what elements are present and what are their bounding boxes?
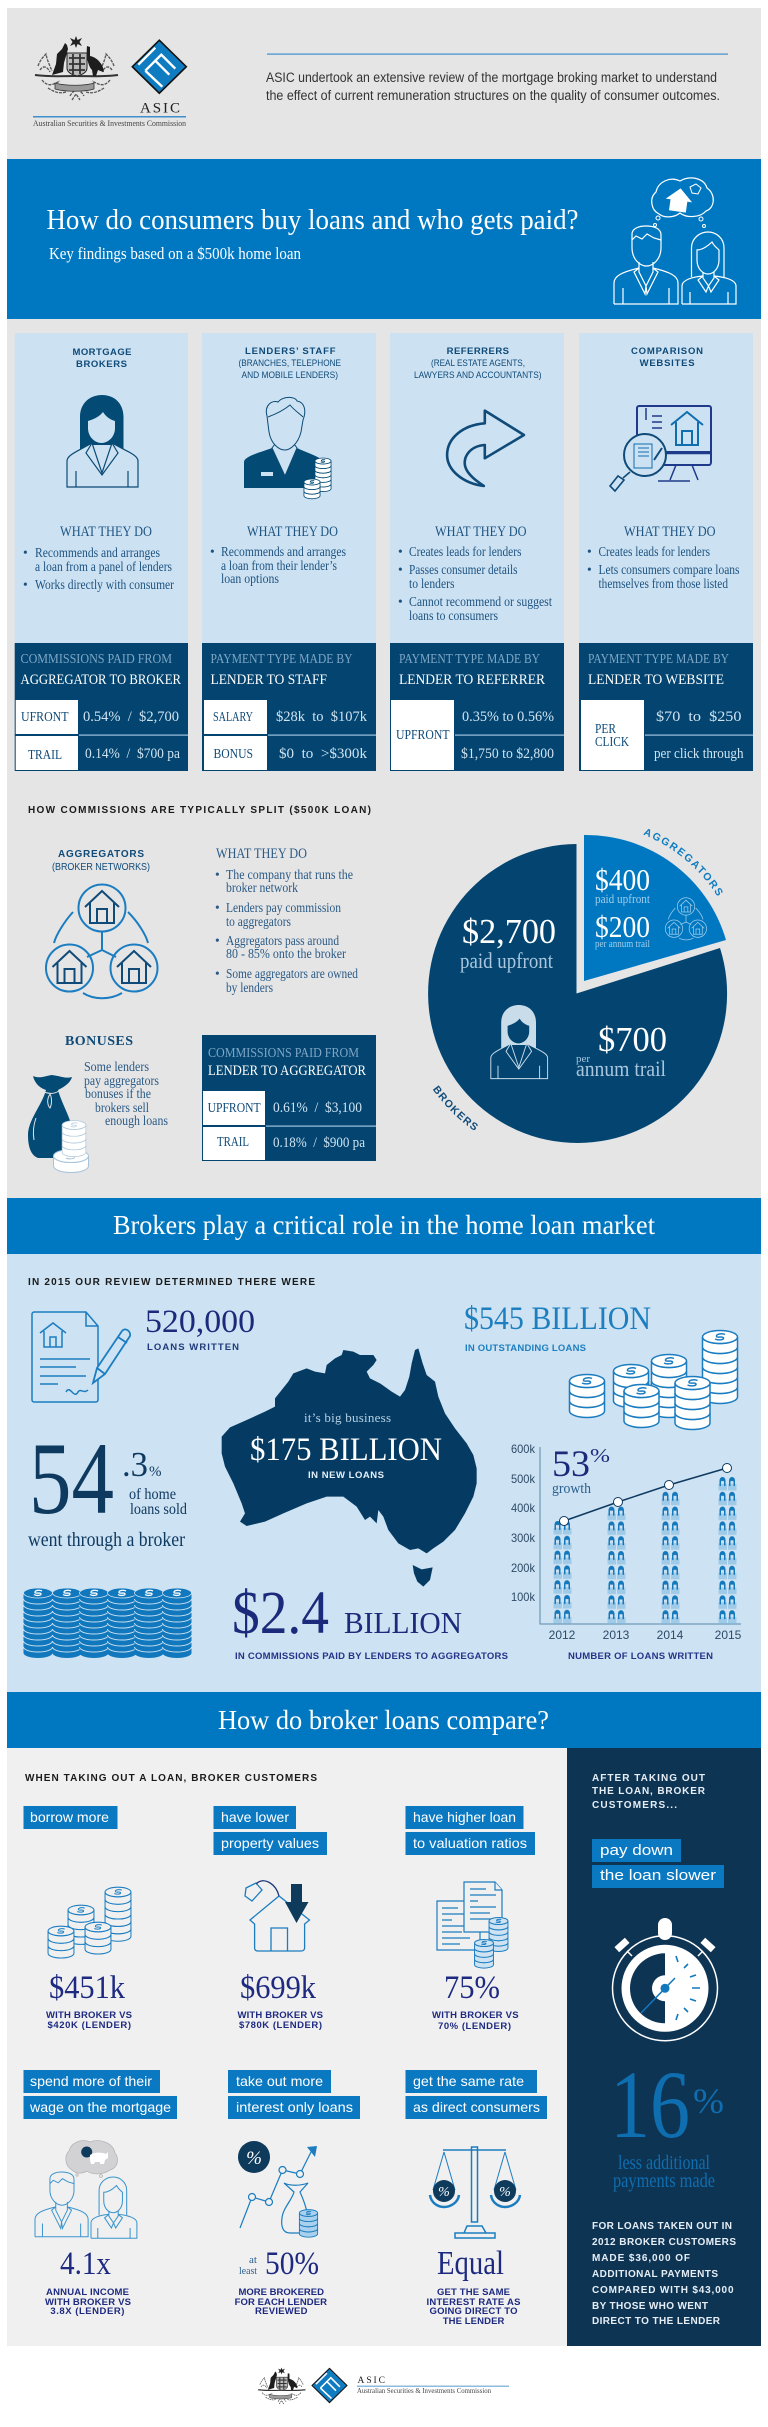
aggregators heading: (BROKER NETWORKS) xyxy=(52,862,150,873)
stat: $545 billion: IN OUTSTANDING LOANS xyxy=(465,1343,586,1354)
stat: $699k: $780K (LENDER) xyxy=(239,2020,322,2031)
payment: lender to website: PER xyxy=(595,722,617,737)
y axis labels: 500k xyxy=(511,1472,536,1486)
icon: couple thinking about a house xyxy=(614,178,736,304)
bonuses text: BONUSES xyxy=(65,1034,133,1049)
table: lender to aggregator: COMMISSIONS PAID FROM xyxy=(208,1046,359,1061)
what they do: referrers: loans to consumers xyxy=(409,608,498,623)
icon: couple and savings cloud xyxy=(35,2141,137,2238)
icon: monitor with magnifier xyxy=(610,406,711,491)
tag: borrow more xyxy=(24,1806,118,1829)
banner: how do broker loans compare: How do broker loans compare? xyxy=(218,1705,549,1735)
stat: $699k: WITH BROKER VS xyxy=(238,2010,323,2021)
stat: $451k xyxy=(46,1970,132,2031)
bonuses text: bonuses if the xyxy=(85,1087,151,1102)
x axis labels: 2015 xyxy=(715,1628,742,1642)
x axis labels xyxy=(549,1628,742,1642)
commissions: aggregator to broker: AGGREGATOR TO BROKER xyxy=(20,672,181,688)
x axis labels: 2014 xyxy=(657,1628,684,1642)
icon: coin stacks, borrow more xyxy=(48,1887,131,1958)
stat: 16% less additional payments: % xyxy=(693,2081,724,2121)
heading: in 2015: IN 2015 OUR REVIEW DETERMINED THERE WERE xyxy=(28,1277,315,1288)
what they do: staff xyxy=(210,524,346,586)
chart: number of loans written: NUMBER OF LOANS WRITTEN xyxy=(568,1651,713,1662)
heading: lenders' staff xyxy=(238,346,341,381)
trend line xyxy=(560,1464,732,1526)
table: lender to aggregator: 0.61% / $3,100 xyxy=(273,1100,362,1116)
icon: balance scales: % xyxy=(438,2185,450,2200)
what aggregators do: The company that runs the xyxy=(226,867,353,882)
what they do: brokers: Works directly with consumer xyxy=(35,577,174,592)
footer ASIC logo: ASIC xyxy=(358,2376,385,2386)
payment: lender to website: PAYMENT TYPE MADE BY xyxy=(588,652,729,667)
text: 2012 additional payments: MADE $36,000 OF xyxy=(592,2253,690,2264)
banner: brokers play a critical role xyxy=(7,1198,761,1254)
what aggregators do: WHAT THEY DO xyxy=(216,846,307,862)
text: 2012 additional payments: ADDITIONAL PAYMENTS xyxy=(592,2269,718,2280)
what aggregators do: Some aggregators are owned xyxy=(226,966,358,981)
pie text: aggregator amounts: per annum trail xyxy=(595,939,650,950)
icon: balance scales: % xyxy=(499,2185,511,2200)
payment: lender to referrer xyxy=(391,652,564,770)
heading: after taking out the loan: CUSTOMERS... xyxy=(592,1800,677,1811)
what they do: brokers: • xyxy=(23,545,28,560)
stat: 54.3%: went through a broker xyxy=(28,1530,185,1551)
icon: curved referral arrow xyxy=(447,411,524,486)
map of Australia xyxy=(222,1348,477,1587)
icon: documents and coins xyxy=(437,1882,508,1968)
tag: lower property values: have lower xyxy=(221,1809,289,1825)
stat: $2.4 billion: BILLION xyxy=(344,1605,462,1640)
pie text: annum trail: per xyxy=(576,1053,590,1065)
pie text: annum trail: annum trail xyxy=(576,1056,666,1081)
icon: aggregator network of houses xyxy=(46,884,158,998)
stat: 75%: 75% xyxy=(444,1970,500,2006)
tag: borrow more: borrow more xyxy=(30,1809,109,1825)
heading: after taking out the loan xyxy=(592,1773,706,1811)
what aggregators do: Aggregators pass around xyxy=(226,933,339,948)
stat: at least 50%: 50% xyxy=(265,2246,319,2282)
stat: 54.3%: % xyxy=(149,1464,162,1480)
heading: referrers: (REAL ESTATE AGENTS, xyxy=(431,358,525,369)
map text: $175 billion in new loans xyxy=(250,1410,442,1481)
header intro text: ASIC undertook an extensive review of the mortgage broking market to understand xyxy=(266,70,717,85)
what they do: referrers: Creates leads for lenders xyxy=(409,544,522,559)
icon: growth chart and money bag: % xyxy=(246,2148,262,2169)
header intro text xyxy=(266,54,728,103)
pie text: paid upfront: $2,700 xyxy=(462,912,556,951)
payment: lender to referrer: LENDER TO REFERRER xyxy=(399,672,545,688)
payment: lender to staff: LENDER TO STAFF xyxy=(210,672,327,688)
what they do: staff: Recommends and arranges xyxy=(221,544,346,559)
stat: at least 50%: least xyxy=(239,2265,257,2277)
text: 2012 additional payments: COMPARED WITH $43,000 xyxy=(592,2285,734,2296)
stat: $451k: $451k xyxy=(49,1970,125,2006)
tag: higher loan to valuation: have higher loan xyxy=(413,1809,516,1825)
stat: $2.4 billion xyxy=(232,1580,508,1662)
y axis labels: 400k xyxy=(511,1501,536,1515)
heading: referrers: LAWYERS AND ACCOUNTANTS) xyxy=(414,370,542,381)
stat: 520,000 loans written: 520,000 xyxy=(145,1304,255,1340)
icon: growth chart and money bag xyxy=(238,2141,318,2237)
x axis labels: 2013 xyxy=(603,1628,630,1642)
panel: comparison websites xyxy=(579,333,753,771)
icon: coin stacks xyxy=(570,1330,738,1430)
commissions: aggregator to broker: UFRONT xyxy=(21,710,69,725)
panel: after taking out the loan xyxy=(567,1748,761,2346)
light blue market panel xyxy=(7,1254,761,1692)
heading: lenders' staff: (BRANCHES, TELEPHONE xyxy=(238,358,341,369)
y axis labels: 100k xyxy=(511,1590,536,1604)
payment: lender to staff: BONUS xyxy=(214,747,253,762)
what they do: brokers: • xyxy=(23,577,28,592)
aggregators heading: AGGREGATORS xyxy=(58,849,144,860)
payment: lender to referrer: 0.35% to 0.56% xyxy=(462,709,554,725)
payment: lender to website: per click through xyxy=(654,746,744,762)
what aggregators do: Lenders pay commission xyxy=(226,900,341,915)
panel: referrers xyxy=(390,333,564,771)
what they do: referrers xyxy=(398,524,552,623)
banner: brokers play a critical role: Brokers play a critical role in the home loan market xyxy=(113,1210,655,1240)
pie text: annum trail xyxy=(576,1020,667,1081)
stat: at least 50%: MORE BROKERED xyxy=(238,2287,324,2298)
stat: 54.3% xyxy=(28,1422,187,1551)
what they do: referrers: WHAT THEY DO xyxy=(435,524,527,540)
stat: at least 50% xyxy=(235,2246,327,2317)
what aggregators do: broker network xyxy=(226,880,298,895)
stat: $545 billion xyxy=(464,1301,651,1354)
tag: spend more of their wage: wage on the mortgage xyxy=(29,2099,171,2115)
y axis labels: 300k xyxy=(511,1531,536,1545)
what they do: referrers: to lenders xyxy=(409,576,454,591)
payment: lender to referrer: UPFRONT xyxy=(396,728,450,743)
people columns xyxy=(553,1476,737,1624)
stat: 75%: WITH BROKER VS xyxy=(432,2010,519,2021)
what they do: websites xyxy=(587,524,740,591)
bonuses text: pay aggregators xyxy=(84,1074,159,1089)
pie slice: aggregators xyxy=(584,835,726,981)
banner: how do consumers buy loans xyxy=(7,159,761,319)
header intro text: the effect of current remuneration structures on the quality of consumer outcomes. xyxy=(266,88,720,103)
heading: when taking out a loan: WHEN TAKING OUT A LOAN, BROKER CUSTOMERS xyxy=(25,1773,317,1784)
stat: 16% less additional payments: payments made xyxy=(613,2170,715,2192)
payment: lender to staff: SALARY xyxy=(213,710,253,725)
what they do: staff: loan options xyxy=(221,571,279,586)
bonuses text: enough loans xyxy=(105,1114,168,1129)
payment: lender to staff: $28k to $107k xyxy=(276,709,367,725)
icon: bank staff member with coins xyxy=(244,397,331,499)
what they do: referrers: Passes consumer details xyxy=(409,562,518,577)
pie label: aggregators: AGGREGATORS xyxy=(643,828,723,896)
map text: $175 billion in new loans: IN NEW LOANS xyxy=(308,1470,384,1481)
stat: 75% xyxy=(432,1970,519,2032)
stat: equal: GOING DIRECT TO xyxy=(430,2306,518,2317)
what they do: brokers: WHAT THEY DO xyxy=(60,524,152,540)
tag: same rate: get the same rate xyxy=(413,2073,524,2089)
tag: pay down the loan slower xyxy=(592,1839,724,1888)
y axis labels: 600k xyxy=(511,1442,536,1456)
pie text: aggregator amounts: paid upfront xyxy=(595,892,650,906)
payment: lender to staff: PAYMENT TYPE MADE BY xyxy=(210,652,352,667)
table: lender to aggregator: 0.18% / $900 pa xyxy=(273,1135,365,1151)
payment: lender to website xyxy=(581,652,753,770)
pie label: brokers: BROKERS xyxy=(433,1085,478,1130)
panel: mortgage brokers xyxy=(15,333,188,771)
stat: 54.3%: of home xyxy=(129,1486,176,1503)
tag: spend more of their wage xyxy=(24,2070,177,2119)
footer ASIC logo xyxy=(258,2368,509,2404)
x axis labels: 2012 xyxy=(549,1628,576,1642)
aggregators heading xyxy=(52,849,150,873)
stat: 16% less additional payments xyxy=(610,2051,724,2192)
text: 2012 additional payments: 2012 BROKER CUSTOMERS xyxy=(592,2237,736,2248)
stat: 54.3%: 54 xyxy=(29,1422,114,1536)
commissions: aggregator to broker: 0.54% / $2,700 xyxy=(83,709,179,725)
what they do: brokers: a loan from a panel of lenders xyxy=(35,559,172,574)
growth label: % xyxy=(590,1445,610,1467)
stat: 4.1x annual income: 4.1x xyxy=(60,2246,111,2282)
text: 2012 additional payments xyxy=(592,2221,736,2327)
banner: how do consumers buy loans: Key findings based on a $500k home loan xyxy=(49,244,301,263)
payment: lender to website: LENDER TO WEBSITE xyxy=(588,672,724,688)
heading: mortgage brokers xyxy=(72,347,132,370)
heading: referrers: REFERRERS xyxy=(447,346,509,357)
icon: money bag and coins xyxy=(28,1075,88,1172)
panel: lenders' staff xyxy=(202,333,376,771)
icon: balance scales xyxy=(430,2147,520,2238)
stat: at least 50%: REVIEWED xyxy=(255,2306,308,2317)
what they do: websites: Lets consumers compare loans xyxy=(598,562,740,577)
pie text: paid upfront xyxy=(460,912,556,973)
what aggregators do: • xyxy=(215,900,220,915)
heading: lenders' staff: LENDERS’ STAFF xyxy=(245,346,336,357)
text: 2012 additional payments: BY THOSE WHO WENT xyxy=(592,2301,708,2312)
table: lender to aggregator: TRAIL xyxy=(217,1135,249,1150)
growth label xyxy=(552,1444,610,1497)
stat: 520,000 loans written: LOANS WRITTEN xyxy=(147,1342,239,1353)
what aggregators do: • xyxy=(215,966,220,981)
y axis labels xyxy=(511,1442,536,1604)
stat: equal: THE LENDER xyxy=(443,2316,505,2327)
tag: lower property values xyxy=(214,1806,327,1855)
stat: 4.1x annual income: WITH BROKER VS xyxy=(45,2297,131,2308)
what they do: referrers: • xyxy=(398,562,403,577)
pie text: aggregator amounts: $200 xyxy=(595,909,650,944)
pie text: aggregator amounts xyxy=(595,862,650,950)
what aggregators do: 80 - 85% onto the broker xyxy=(226,946,346,961)
what they do: websites: • xyxy=(587,544,592,559)
tag: interest only loans: take out more xyxy=(236,2073,323,2089)
pie text: annum trail: $700 xyxy=(598,1020,667,1059)
what they do: staff: WHAT THEY DO xyxy=(247,524,338,540)
stat: equal: INTEREST RATE AS xyxy=(426,2297,520,2308)
bonuses text: Some lenders xyxy=(84,1060,149,1075)
stat: 54.3%: loans sold xyxy=(130,1501,187,1518)
stat: 75%: 70% (LENDER) xyxy=(438,2021,511,2032)
what aggregators do: by lenders xyxy=(226,980,273,995)
stat: 54.3%: .3 xyxy=(122,1445,148,1484)
pie text: paid upfront: paid upfront xyxy=(460,948,553,973)
stat: at least 50%: FOR EACH LENDER xyxy=(235,2297,327,2308)
stat: $699k xyxy=(238,1970,323,2031)
stat: at least 50%: at xyxy=(249,2254,257,2266)
what aggregators do xyxy=(215,846,358,995)
header: ASIC logo: Australian Securities & Investments Commission xyxy=(33,119,186,128)
icon: house with price falling xyxy=(245,1881,310,1951)
table: lender to aggregator: LENDER TO AGGREGATOR xyxy=(208,1063,366,1079)
tag: same rate xyxy=(406,2070,547,2119)
chart: number of loans written xyxy=(511,1442,742,1662)
heading: mortgage brokers: BROKERS xyxy=(76,359,127,370)
what they do: referrers: • xyxy=(398,544,403,559)
what they do: referrers: Cannot recommend or suggest xyxy=(409,594,552,609)
what they do: websites: themselves from those listed xyxy=(598,576,728,591)
icon: broker in pie xyxy=(491,1005,548,1079)
stat: 16% less additional payments: less additional xyxy=(618,2152,710,2174)
tag: higher loan to valuation: to valuation ratios xyxy=(413,1835,527,1851)
icon: rows of blue coins xyxy=(24,1588,192,1658)
footer ASIC logo: Australian Securities & Investments Commission xyxy=(357,2387,491,2395)
growth label: growth xyxy=(552,1481,591,1497)
stat: $451k: WITH BROKER VS xyxy=(46,2010,132,2021)
icon: stopwatch xyxy=(612,1918,718,2041)
panel: when taking out a loan xyxy=(7,1748,567,2346)
stat: $451k: $420K (LENDER) xyxy=(48,2020,131,2031)
text: 2012 additional payments: DIRECT TO THE LENDER xyxy=(592,2316,721,2327)
what they do: websites: • xyxy=(587,562,592,577)
commissions: aggregator to broker xyxy=(16,652,188,770)
stat: equal xyxy=(426,2245,520,2327)
what aggregators do: to aggregators xyxy=(226,914,291,929)
stat: $699k: $699k xyxy=(240,1970,316,2006)
tag: pay down the loan slower: the loan slower xyxy=(600,1867,716,1884)
what aggregators do: • xyxy=(215,867,220,882)
tag: interest only loans: interest only loans xyxy=(236,2099,353,2115)
payment: lender to staff: $0 to >$300k xyxy=(279,746,367,762)
heading: after taking out the loan: THE LOAN, BROKER xyxy=(592,1786,706,1797)
banner: how do consumers buy loans: How do consumers buy loans and who gets paid? xyxy=(46,204,578,236)
pie text: aggregator amounts: $400 xyxy=(595,862,650,897)
what aggregators do: • xyxy=(215,933,220,948)
header: ASIC logo xyxy=(33,36,186,128)
bonuses text xyxy=(65,1034,168,1129)
payment: lender to referrer: $1,750 to $2,800 xyxy=(461,746,554,762)
commissions: aggregator to broker: TRAIL xyxy=(28,748,62,763)
top grey background panel xyxy=(7,8,761,1198)
tag: same rate: as direct consumers xyxy=(413,2099,540,2115)
table: lender to aggregator xyxy=(202,1035,376,1161)
stat: $2.4 billion: $2.4 xyxy=(232,1580,329,1647)
commissions: aggregator to broker: 0.14% / $700 pa xyxy=(85,746,180,762)
heading: after taking out the loan: AFTER TAKING OUT xyxy=(592,1773,705,1784)
stat: 16% less additional payments: 16 xyxy=(610,2051,690,2158)
heading: referrers xyxy=(414,346,542,381)
commissions: aggregator to broker: COMMISSIONS PAID FROM xyxy=(20,652,172,667)
what they do: websites: WHAT THEY DO xyxy=(624,524,716,540)
map text: $175 billion in new loans: $175 BILLION xyxy=(250,1432,442,1468)
heading: comparison websites: COMPARISON xyxy=(631,346,703,357)
heading: comparison websites: WEBSITES xyxy=(640,358,695,369)
stat: equal: GET THE SAME xyxy=(437,2287,510,2298)
pie slice: brokers xyxy=(428,844,727,1143)
tag: higher loan to valuation xyxy=(406,1806,535,1855)
payment: lender to website: CLICK xyxy=(595,735,629,750)
pie chart: commission split xyxy=(428,828,728,1143)
payment: lender to website: $70 to $250 xyxy=(656,709,742,725)
banner: how do broker loans compare xyxy=(7,1692,761,1748)
map text: $175 billion in new loans: it’s big business xyxy=(304,1410,391,1425)
tag: spend more of their wage: spend more of their xyxy=(30,2073,152,2089)
stat: 4.1x annual income xyxy=(45,2246,131,2317)
tag: pay down the loan slower: pay down xyxy=(600,1842,673,1859)
what they do: staff: • xyxy=(210,544,215,559)
what they do: brokers: Recommends and arranges xyxy=(35,545,160,560)
stat: $545 billion: $545 BILLION xyxy=(464,1301,651,1337)
growth label: 53 xyxy=(552,1444,590,1485)
stat: 4.1x annual income: ANNUAL INCOME xyxy=(46,2287,129,2298)
table: lender to aggregator: UPFRONT xyxy=(208,1101,261,1116)
heading: lenders' staff: AND MOBILE LENDERS) xyxy=(242,370,338,381)
tag: lower property values: property values xyxy=(221,1835,319,1851)
heading: mortgage brokers: MORTGAGE xyxy=(72,347,132,358)
stat: $2.4 billion: IN COMMISSIONS PAID BY LENDERS TO AGGREGATORS xyxy=(235,1651,508,1662)
heading: comparison websites xyxy=(631,346,703,369)
icon: mini aggregator network xyxy=(665,898,707,940)
icon: woman broker xyxy=(67,395,138,487)
heading: how commissions are split: HOW COMMISSIONS ARE TYPICALLY SPLIT ($500K LOAN) xyxy=(28,805,371,816)
what they do: websites: Creates leads for lenders xyxy=(598,544,710,559)
text: 2012 additional payments: FOR LOANS TAKEN OUT IN xyxy=(592,2221,732,2232)
what they do: referrers: • xyxy=(398,594,403,609)
what they do: brokers xyxy=(23,524,174,592)
what they do: staff: a loan from their lender’s xyxy=(221,558,337,573)
header: ASIC logo: ASIC xyxy=(140,101,180,117)
stat: equal: Equal xyxy=(437,2245,504,2282)
stat: 4.1x annual income: 3.8X (LENDER) xyxy=(50,2306,124,2317)
y axis labels: 200k xyxy=(511,1561,536,1575)
icon: loan document and pen xyxy=(32,1312,130,1402)
payment: lender to staff xyxy=(204,652,376,770)
bonuses text: brokers sell xyxy=(95,1101,149,1116)
tag: interest only loans xyxy=(228,2070,360,2119)
payment: lender to referrer: PAYMENT TYPE MADE BY xyxy=(399,652,540,667)
